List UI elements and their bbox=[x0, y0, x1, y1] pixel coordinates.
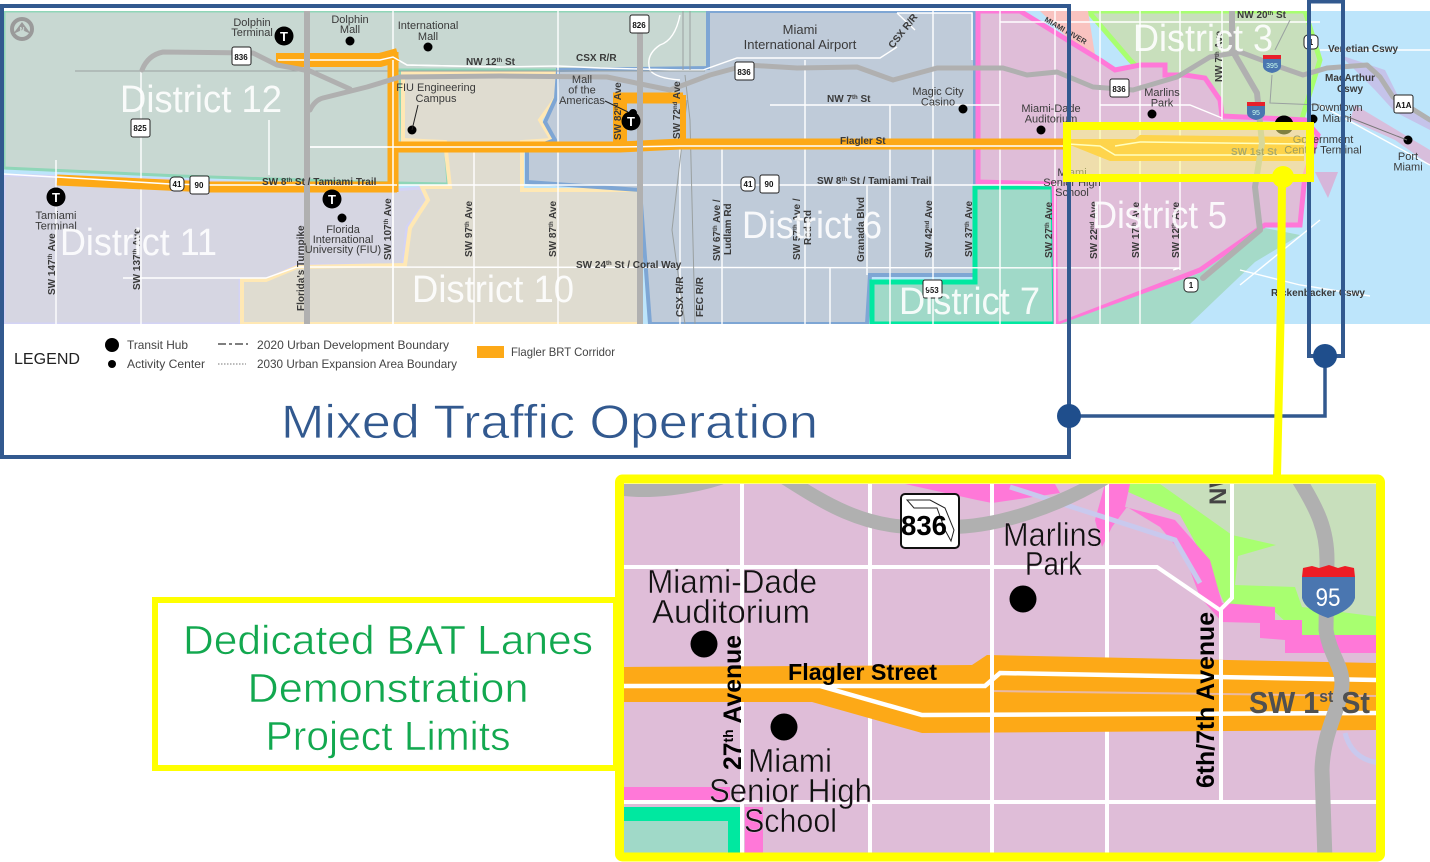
title: Mixed Traffic Operation: Mixed Traffic Operation bbox=[281, 395, 818, 448]
label: FIU Engineering Campus: FIU Engineering bbox=[396, 82, 476, 94]
street: SW 72nd Ave: Ave bbox=[672, 81, 683, 102]
icon: north arrow: N bbox=[19, 27, 25, 34]
street: SW 8th St west: SW 8 bbox=[262, 177, 286, 188]
street: SW 12th Ave: Ave bbox=[1171, 201, 1182, 222]
route shield: 836 east bbox=[1110, 79, 1129, 97]
street: Flagler St: Flagler St bbox=[840, 136, 886, 147]
region: district 11 bbox=[4, 175, 427, 324]
transit hub: Tamiami: T bbox=[52, 190, 60, 205]
route shield: 836 airport bbox=[735, 62, 754, 80]
legend item: Flagler BRT corridor: Flagler BRT Corridor bbox=[511, 345, 615, 359]
street: CSX R/R north: CSX R/R bbox=[576, 53, 617, 64]
label: Dolphin Mall: Dolphin bbox=[331, 14, 369, 26]
label: Miami River: MIAMI RIVER bbox=[1043, 15, 1089, 47]
street: NW 7th St: St bbox=[858, 94, 871, 105]
route shield: US 1 south: 1 bbox=[1189, 281, 1194, 290]
street: NW 7th Ave: NW 7 bbox=[1214, 57, 1225, 82]
label: Mall of the Americas: Mall bbox=[572, 74, 592, 86]
inset marker: Miami-Dade Auditorium: Miami-Dade bbox=[647, 563, 817, 600]
frame: inset map border bbox=[620, 479, 1380, 857]
inset street: Flagler Street: Flagler Street bbox=[788, 659, 937, 685]
label: Port Miami: Miami bbox=[1393, 162, 1423, 174]
icon: north arrow bbox=[12, 19, 32, 39]
label: Miami Senior High School: School bbox=[1055, 187, 1089, 199]
street: SW 82nd Ave: Ave bbox=[613, 82, 624, 103]
route shield: 90 east: 90 bbox=[765, 180, 774, 189]
label: Downtown Miami: Downtown bbox=[1311, 102, 1363, 114]
inset street: 6th/7th Avenue: 6th/7th Avenue bbox=[1192, 612, 1220, 788]
street: SW 67th Ave: SW 67 bbox=[712, 231, 723, 261]
street labels bbox=[47, 10, 1398, 317]
street: SW 87th Ave: Ave bbox=[548, 200, 559, 221]
street: CSX R/R south: CSX R/R bbox=[675, 276, 686, 317]
street: SW 27th Ave: SW 27 bbox=[1044, 228, 1055, 258]
inset: partial street label NW 7th: NW bbox=[1205, 465, 1232, 505]
street: SW 22nd Ave: nd bbox=[1090, 221, 1096, 229]
inset marker: Miami Senior High School: Senior High bbox=[709, 772, 872, 809]
label: Magic City Casino: Magic City bbox=[912, 86, 964, 98]
label: Government Center Terminal: Center Terminal bbox=[1284, 144, 1362, 156]
route shield: 836 west: 836 bbox=[234, 53, 248, 62]
street: SW 12th Ave: SW 12 bbox=[1171, 228, 1182, 258]
transit hub: FIU: T bbox=[328, 192, 336, 207]
panel: inset map of project limits bbox=[624, 465, 1380, 860]
street: SW 82nd Ave: nd bbox=[614, 102, 620, 110]
inset: I-95 highway bbox=[1298, 478, 1342, 860]
highways in grey bbox=[142, 11, 1430, 324]
street: SW 22nd Ave: SW 22 bbox=[1089, 229, 1100, 259]
street: MacArthur Cswy: MacArthur bbox=[1325, 73, 1375, 84]
legend item: activity center: Activity Center bbox=[127, 357, 205, 371]
route shield: 825: 825 bbox=[133, 124, 147, 133]
route shield: 953 bbox=[923, 280, 942, 298]
label: International Mall: Mall bbox=[418, 31, 438, 43]
label: Dolphin Terminal: Terminal bbox=[231, 27, 273, 39]
street: SW 137th Ave: th bbox=[133, 248, 139, 254]
street: NW 12th St: NW 12 bbox=[466, 57, 497, 68]
street: FEC R/R: FEC R/R bbox=[695, 276, 706, 317]
transit hub: Tamiami bbox=[46, 188, 66, 206]
street: NW 7th St: th bbox=[852, 95, 858, 101]
label: Magic City Casino: Casino bbox=[921, 96, 955, 108]
label: Miami Senior High School: Senior High bbox=[1043, 177, 1101, 189]
inset street: SW 1st St: SW 1 bbox=[1249, 685, 1325, 720]
street: SW 67th Ave: Ave / bbox=[712, 199, 723, 225]
street: SW 37th Ave: th bbox=[965, 221, 971, 227]
inset marker: Miami-Dade Auditorium bbox=[647, 563, 817, 658]
route shield: 41 west: 41 bbox=[173, 180, 182, 189]
inset icon: I-95 shield bbox=[1302, 565, 1355, 618]
frame: mixed traffic east bbox=[1309, 2, 1343, 356]
inset icon: I-95 shield: 95 bbox=[1316, 584, 1340, 612]
label: Florida International University: Florida bbox=[326, 224, 360, 236]
street: SW 8th St east: St / Tamiami Trail bbox=[847, 176, 932, 187]
label: Government Center Terminal: Government bbox=[1293, 134, 1353, 146]
label: District 6: District 6 bbox=[742, 205, 882, 247]
street: SW 57th Ave: SW 57 bbox=[792, 230, 803, 260]
route shield: 953: 953 bbox=[925, 286, 939, 295]
street: NW 12th St: St bbox=[502, 57, 516, 68]
street: SW 8th St east: th bbox=[841, 177, 847, 183]
street: SW 82nd Ave: SW 82 bbox=[613, 110, 624, 140]
route shield: 836 east: 836 bbox=[1112, 85, 1126, 94]
street: CSX R/R diagonal: CSX R/R bbox=[887, 11, 921, 51]
inset marker: Marlins Park bbox=[1003, 516, 1102, 612]
street: Venetian Cswy: Venetian Cswy bbox=[1328, 44, 1398, 55]
street: SW 8th St west: th bbox=[286, 178, 292, 184]
transit hub: Mall of the Americas bbox=[622, 112, 640, 130]
inset marker: Miami Senior High School: School bbox=[744, 802, 837, 839]
district labels bbox=[60, 18, 1273, 323]
route shield: A1A: A1A bbox=[1395, 101, 1412, 110]
label: International Mall: International bbox=[398, 20, 458, 32]
street: SW 87th Ave: SW 87 bbox=[548, 227, 559, 257]
label: District 3: District 3 bbox=[1133, 18, 1273, 60]
street: SW 97th Ave: SW 97 bbox=[464, 227, 475, 257]
street: SW 72nd Ave: nd bbox=[673, 101, 679, 109]
street: SW 37th Ave: Ave bbox=[964, 200, 975, 221]
street: SW 107th Ave: SW 107 bbox=[383, 224, 394, 260]
transit hub: Dolphin: T bbox=[280, 29, 288, 44]
route shield: US 1 south bbox=[1184, 278, 1198, 292]
label: Tamiami Terminal: Terminal bbox=[35, 220, 77, 232]
inset street: SW 1st St: St bbox=[1333, 685, 1370, 720]
street: SW 17th Ave: SW 17 bbox=[1131, 228, 1142, 258]
legend item: urban expansion boundary: 2030 Urban Expansion Area Boundary bbox=[257, 357, 457, 371]
inset: Flagler corridor in orange bbox=[624, 655, 1376, 733]
inset: district 3 green area bbox=[1150, 484, 1376, 620]
route shield: 826: 826 bbox=[632, 21, 646, 30]
highlight: demonstration project area bbox=[1067, 126, 1310, 188]
route shield: 41 east: 41 bbox=[744, 180, 753, 189]
street: NW 7th St: NW 7 bbox=[827, 94, 852, 105]
transit hub: FIU bbox=[322, 190, 342, 208]
label: Tamiami Terminal: Tamiami bbox=[36, 210, 76, 222]
street: Red Rd: Red Rd bbox=[803, 210, 814, 245]
label: District 10: District 10 bbox=[412, 269, 574, 311]
inset marker: Miami Senior High School bbox=[709, 714, 872, 839]
street: SW 42nd Ave: Ave bbox=[924, 200, 935, 221]
inset: district 7 corner bbox=[624, 807, 740, 853]
inset street: SW 1st St: st bbox=[1319, 687, 1334, 706]
route shield: US 1 north bbox=[1304, 35, 1318, 49]
street: SW 42nd Ave: SW 42 bbox=[924, 228, 935, 258]
street: SW 107th Ave: Ave bbox=[383, 198, 394, 219]
street: NW 20th St: St bbox=[1273, 10, 1287, 21]
street: SW 42nd Ave: nd bbox=[925, 220, 931, 228]
label: Mall of the Americas: of the bbox=[568, 84, 596, 96]
label: Marlins Park: Park bbox=[1151, 98, 1174, 110]
label: District 12: District 12 bbox=[120, 79, 282, 121]
street: NW 7th Ave: Ave bbox=[1214, 31, 1225, 51]
street: SW 147th Ave: th bbox=[48, 253, 54, 259]
frame: mixed traffic west bbox=[2, 6, 1069, 457]
route shield: I-95: 95 bbox=[1252, 110, 1260, 117]
street: SW 147th Ave: SW 147 bbox=[47, 259, 58, 295]
Flagler BRT corridor in orange bbox=[57, 52, 1068, 192]
label: Miami Senior High School: Miami bbox=[1057, 167, 1087, 179]
inset marker: Miami Senior High School: Miami bbox=[748, 742, 832, 779]
label: District 7: District 7 bbox=[899, 281, 1040, 323]
inset street: 27th Avenue: th bbox=[720, 729, 736, 742]
street: SW 17th Ave: th bbox=[1132, 222, 1138, 228]
label: Port Miami: Port bbox=[1398, 151, 1418, 163]
region: district 10 bbox=[242, 73, 640, 324]
street: SW 22nd Ave: Ave bbox=[1089, 201, 1100, 222]
street: SW 97th Ave: th bbox=[465, 221, 471, 227]
region: district 3 bbox=[1088, 11, 1320, 125]
lavender shore strips bbox=[1010, 487, 1380, 763]
street: SW 24th St: SW 24 bbox=[576, 260, 606, 271]
route shield: 90 west: 90 bbox=[195, 181, 204, 190]
street: SW 147th Ave: Ave bbox=[47, 233, 58, 254]
label: Marlins Park: Marlins bbox=[1144, 87, 1180, 99]
transit hub: Dolphin bbox=[274, 26, 294, 46]
legend item: urban development boundary: 2020 Urban Development Boundary bbox=[257, 338, 449, 352]
transit hub: Mall of the Americas: T bbox=[627, 114, 635, 129]
region: district 7 bbox=[872, 187, 1055, 324]
activity center dots bbox=[338, 36, 1412, 222]
street: SW 17th Ave: Ave bbox=[1131, 201, 1142, 222]
route shield: 836 west bbox=[232, 47, 251, 65]
route shield: 825 bbox=[131, 119, 150, 137]
inset street: 27th Avenue: Avenue bbox=[719, 635, 747, 729]
street: NW 12th St: th bbox=[497, 58, 503, 64]
label: Downtown Miami: Miami bbox=[1322, 113, 1352, 125]
street: SW 137th Ave: SW 137 bbox=[132, 254, 143, 290]
street: Granada Blvd: Granada Blvd bbox=[856, 197, 867, 262]
label: FIU Engineering Campus: Campus bbox=[416, 93, 457, 105]
route shield: US 1 north: 1 bbox=[1309, 38, 1314, 47]
region: district 6 bbox=[527, 11, 975, 324]
street: Florida's Turnpike: Florida's Turnpike bbox=[296, 225, 307, 311]
street: SW 57th Ave: th bbox=[793, 224, 799, 230]
street: SW 24th St: th bbox=[606, 261, 612, 267]
callout text: Project Limits bbox=[266, 713, 510, 759]
callout text: Demonstration bbox=[248, 665, 528, 711]
corridor within the demonstration project limits bbox=[1068, 135, 1304, 161]
label: District 5: District 5 bbox=[1092, 195, 1227, 237]
street: SW 87th Ave: th bbox=[549, 221, 555, 227]
route shield: 836 airport: 836 bbox=[737, 68, 751, 77]
street: SW 57th Ave: Ave / bbox=[792, 198, 803, 224]
map labels bbox=[35, 14, 1423, 256]
street: Rickenbacker Cswy: Rickenbacker Cswy bbox=[1271, 288, 1365, 299]
street: MacArthur Cswy: Cswy bbox=[1337, 84, 1363, 95]
region: district 12 bbox=[4, 11, 708, 184]
inset icon: SR 836 shield bbox=[901, 494, 959, 548]
legend bbox=[14, 338, 615, 371]
label: Mall of the Americas: Americas bbox=[559, 95, 605, 107]
label: Miami International Airport: International Airport bbox=[744, 37, 857, 52]
route shield: I-395: 395 bbox=[1266, 63, 1278, 70]
connector line to inset bbox=[1277, 177, 1282, 476]
inset marker: Miami-Dade Auditorium: Auditorium bbox=[652, 593, 810, 630]
inset marker: Marlins Park: Marlins bbox=[1003, 516, 1102, 553]
street: Ludlam Rd: Ludlam Rd bbox=[723, 203, 734, 255]
street: SW 27th Ave: Ave bbox=[1044, 201, 1055, 222]
route shield: I-95 bbox=[1247, 102, 1265, 120]
label: Miami International Airport: Miami bbox=[783, 22, 817, 37]
street: NW 20th St: th bbox=[1268, 11, 1274, 17]
route shield: 826 bbox=[630, 15, 649, 33]
street: SW 97th Ave: Ave bbox=[464, 200, 475, 221]
callout: dedicated BAT lanes label bbox=[155, 600, 616, 768]
legend item: transit hub: Transit Hub bbox=[127, 338, 188, 352]
street: SW 8th St east: SW 8 bbox=[817, 176, 841, 187]
street: SW 72nd Ave: SW 72 bbox=[672, 109, 683, 139]
rail lines bbox=[75, 11, 1320, 324]
label: Dolphin Mall: Mall bbox=[340, 24, 360, 36]
label: Miami-Dade Auditorium: Miami-Dade bbox=[1021, 103, 1081, 115]
street: SW 27th Ave: th bbox=[1045, 222, 1051, 228]
route shield: 90 west bbox=[190, 176, 209, 194]
route shield: A1A bbox=[1394, 95, 1413, 113]
white local roads bbox=[4, 11, 1430, 324]
label: Miami-Dade Auditorium: Auditorium bbox=[1025, 114, 1077, 126]
street: SW 12th Ave: th bbox=[1172, 222, 1178, 228]
street: SW 107th Ave: th bbox=[384, 218, 390, 224]
street: SW 8th St west: St / Tamiami Trail bbox=[292, 177, 377, 188]
callout text: Dedicated BAT Lanes bbox=[183, 617, 593, 663]
label: Dolphin Terminal: Dolphin bbox=[233, 17, 271, 29]
inset street: 27th Avenue: 27 bbox=[719, 742, 747, 770]
panel: district overview map bbox=[4, 10, 1430, 324]
inset: magenta district boundary bbox=[1095, 484, 1380, 653]
street: SW 1st St overview: SW 1st St bbox=[1231, 147, 1278, 158]
transit hub: Government Center bbox=[1274, 116, 1294, 134]
route shield: 90 east bbox=[760, 175, 779, 193]
connector between mixed traffic frames bbox=[1057, 344, 1337, 428]
street: SW 24th St: St / Coral Way bbox=[612, 260, 682, 271]
region: district 5 bbox=[978, 11, 1318, 324]
label: Florida International University: International bbox=[313, 234, 373, 246]
region: islands and port bbox=[1060, 228, 1300, 324]
street: SW 137th Ave: Ave bbox=[132, 228, 143, 249]
label: District 11: District 11 bbox=[60, 222, 217, 264]
route shield: 41 east bbox=[741, 177, 755, 191]
legend heading: LEGEND bbox=[14, 351, 80, 368]
route shield: I-395 bbox=[1263, 55, 1281, 73]
street: SW 37th Ave: SW 37 bbox=[964, 227, 975, 257]
inset: SR 836 highway bbox=[624, 478, 1105, 527]
inset: local white streets bbox=[624, 484, 1376, 853]
label: Florida International University: University (FIU) bbox=[305, 244, 381, 256]
route shield: 41 west bbox=[170, 177, 184, 191]
street: NW 7th Ave: th bbox=[1215, 51, 1221, 57]
street: NW 20th St: NW 20 bbox=[1237, 10, 1268, 21]
inset marker: Marlins Park: Park bbox=[1025, 545, 1082, 582]
street: SW 67th Ave: th bbox=[713, 225, 719, 231]
inset icon: SR 836 shield: 836 bbox=[901, 510, 947, 541]
